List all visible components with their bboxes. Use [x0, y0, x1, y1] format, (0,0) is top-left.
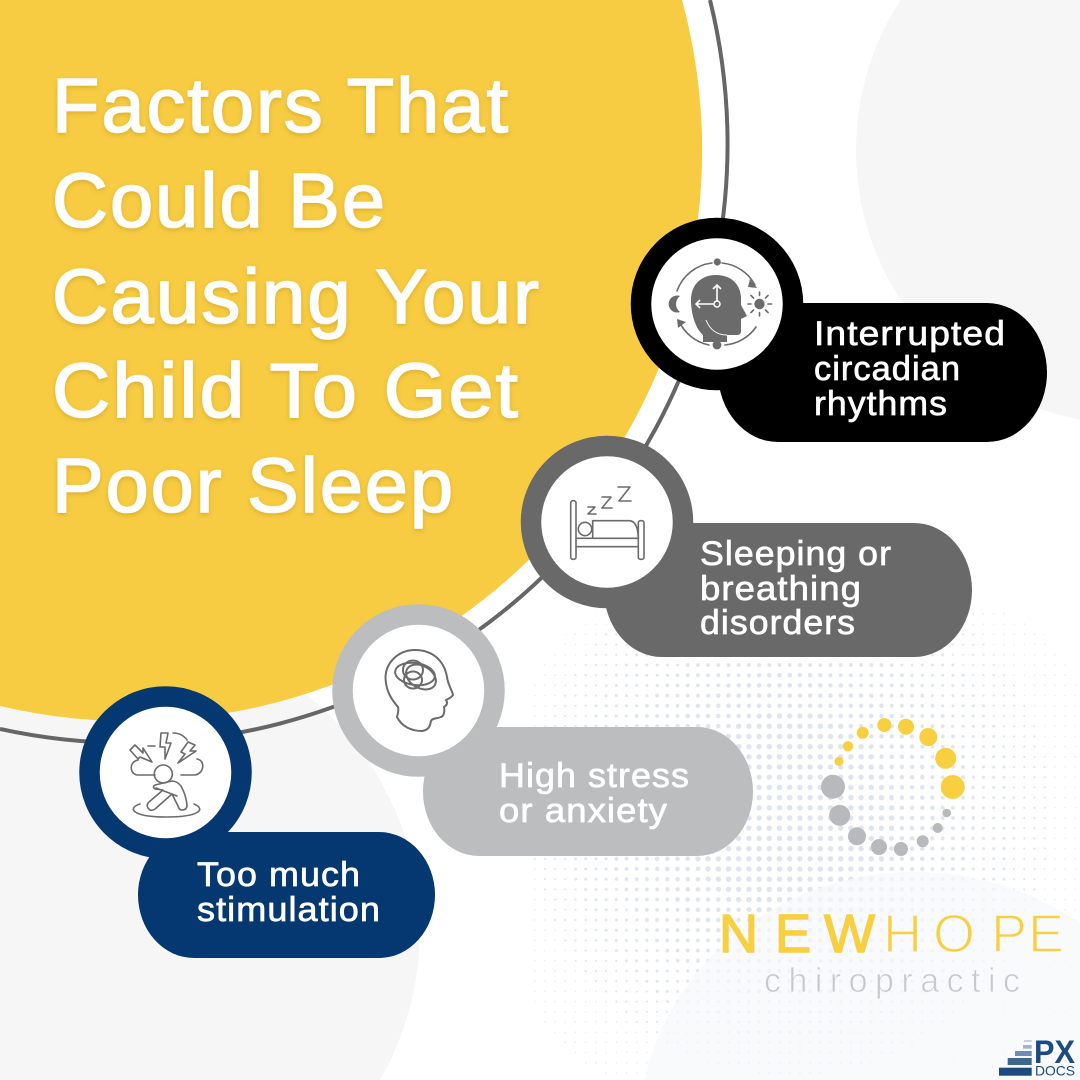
yellow title circle [0, 0, 702, 721]
background circle: upper right [856, 0, 1080, 419]
label: circadian [814, 350, 961, 388]
badge: black ring [641, 228, 793, 380]
label: Sleeping or [700, 535, 892, 573]
pill: light grey [423, 727, 753, 856]
logo word: chiropractic: chiropractic [764, 962, 1020, 1000]
PX: PX [1034, 1034, 1076, 1070]
item: high stress or anxiety [342, 614, 753, 856]
title: Factors That [52, 63, 510, 149]
staircase icon [999, 1040, 1032, 1076]
pill: dark grey [604, 523, 972, 657]
icon: head with clock, sun and moon [669, 258, 772, 349]
label [700, 535, 892, 642]
title: Causing Your [52, 254, 541, 340]
pale blue blob over dots [645, 872, 1080, 1080]
label [499, 757, 690, 830]
label: stimulation [197, 891, 381, 929]
badge: light grey ring [342, 614, 494, 766]
icon: overwhelmed child with lightning [130, 733, 203, 817]
label: breathing [700, 570, 862, 608]
label: Interrupted [814, 315, 1006, 353]
icon: person sleeping in bed [571, 487, 644, 559]
label: rhythms [814, 385, 948, 423]
pill: navy [138, 832, 435, 958]
badge: dark grey ring [531, 446, 683, 598]
pill: black [718, 303, 1047, 442]
item: too much stimulation [90, 696, 435, 958]
label: High stress [499, 757, 690, 795]
item: interrupted circadian rhythms [641, 228, 1047, 442]
logo word: NEW: NEW [719, 904, 875, 964]
label: disorders [700, 604, 856, 642]
logo word: HOPE: HOPE [883, 904, 1064, 964]
label [814, 315, 1006, 423]
background circle: lower left [0, 630, 420, 1080]
logo mark: dot circle [821, 718, 965, 856]
label: Too much [197, 856, 361, 894]
icon: head with tangled thoughts [386, 650, 453, 731]
logo: New Hope Chiropractic [719, 718, 1064, 1000]
title: Poor Sleep [52, 443, 455, 529]
title [52, 63, 541, 529]
title: Child To Get [52, 348, 520, 434]
DOCS: DOCS [1035, 1062, 1075, 1078]
thin grey ring [0, 0, 728, 743]
label [197, 856, 381, 929]
halftone dot field [530, 555, 1080, 1080]
item: sleeping or breathing disorders [531, 446, 972, 657]
label: or anxiety [499, 792, 668, 830]
title: Could Be [52, 158, 387, 244]
PX Docs mark [999, 1034, 1076, 1078]
badge: navy ring [90, 696, 242, 848]
